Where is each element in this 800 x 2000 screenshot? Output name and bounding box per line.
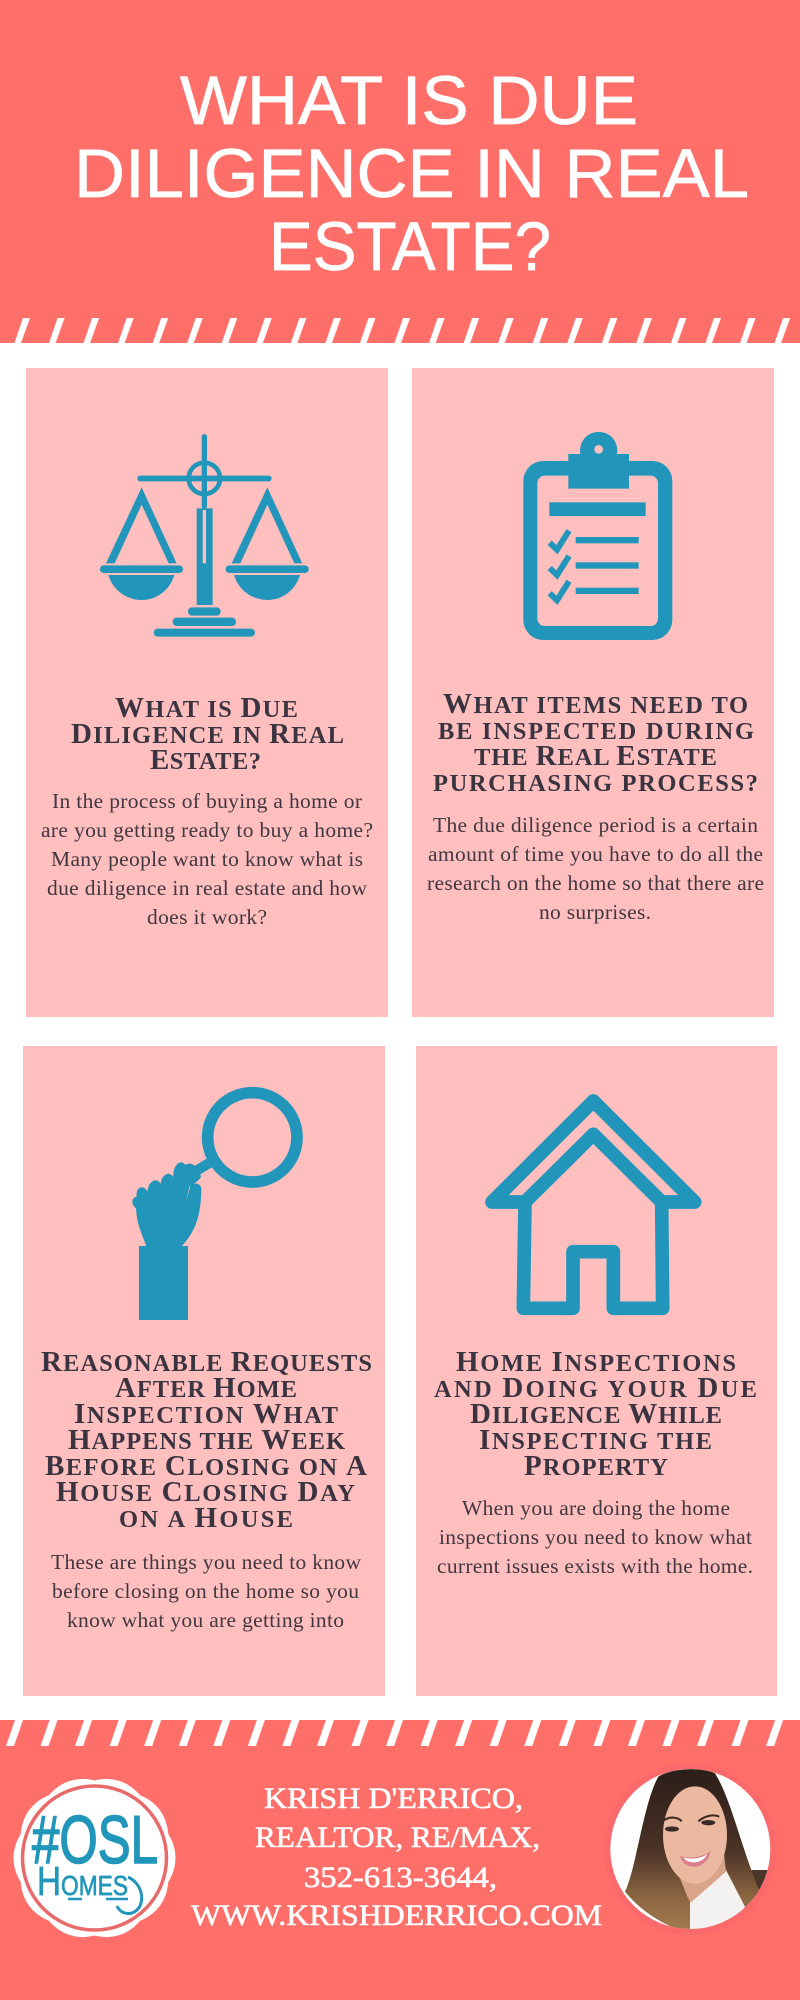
body text (427, 813, 764, 924)
heading: AND DOING YOUR DUE (434, 1372, 757, 1404)
body text: These are things you need to know (51, 1550, 361, 1574)
logo: #OSL Homes badge (0, 1763, 194, 1953)
body text (51, 1550, 361, 1632)
title: DILIGENCE IN REAL (74, 135, 749, 212)
heading: DILIGENCE WHILE (470, 1398, 722, 1430)
body text: are you getting ready to buy a home? (41, 818, 373, 842)
heading: ON A HOUSE (119, 1502, 293, 1534)
body text: research on the home so that there are (427, 871, 764, 895)
heading: WHAT ITEMS NEED TO (443, 688, 748, 720)
logo: #OSL Homes badge: #OSL (32, 1802, 158, 1878)
footer banner (0, 1720, 800, 2000)
body text: Many people want to know what is (51, 847, 363, 871)
title: WHAT IS DUE (180, 62, 638, 139)
heading: REASONABLE REQUESTS (41, 1346, 372, 1378)
body text: When you are doing the home (462, 1496, 730, 1520)
title: ESTATE? (269, 208, 551, 285)
contact details: REALTOR, RE/MAX, (255, 1821, 540, 1854)
heading: PROPERTY (524, 1450, 668, 1482)
icon: scales of justice (100, 434, 309, 637)
title (74, 62, 749, 285)
body text: inspections you need to know what (439, 1525, 752, 1549)
body text (41, 789, 373, 929)
heading: THE REAL ESTATE (474, 740, 717, 772)
heading: BEFORE CLOSING ON A (45, 1450, 367, 1482)
heading (41, 1346, 372, 1534)
heading: AFTER HOME (115, 1372, 297, 1404)
panel: home inspections (416, 1046, 777, 1696)
body text (437, 1496, 753, 1578)
heading: HAPPENS THE WEEK (68, 1424, 345, 1456)
icon: house (492, 1101, 695, 1308)
icon: hand holding magnifying glass (132, 1093, 297, 1320)
heading: HOUSE CLOSING DAY (56, 1476, 355, 1508)
heading: WHAT IS DUE (115, 692, 298, 724)
body text: no surprises. (539, 900, 651, 924)
body text: know what you are getting into (67, 1608, 344, 1632)
header banner (0, 0, 800, 343)
contact details: 352-613-3644, (304, 1861, 497, 1894)
portrait photo (610, 1769, 770, 1929)
logo: #OSL Homes badge: HOMES (37, 1858, 128, 1904)
heading: DILIGENCE IN REAL (71, 718, 344, 750)
body text: due diligence in real estate and how (47, 876, 367, 900)
contact details: KRISH D'ERRICO, (264, 1782, 523, 1815)
icon: clipboard checklist (523, 432, 672, 640)
body text: before closing on the home so you (52, 1579, 359, 1603)
heading: PURCHASING PROCESS? (433, 770, 758, 797)
heading (71, 692, 344, 776)
body text: does it work? (147, 905, 267, 929)
body text: current issues exists with the home. (437, 1554, 753, 1578)
heading: BE INSPECTED DURING (438, 718, 754, 745)
panel: items to inspect (412, 368, 774, 1017)
body text: amount of time you have to do all the (428, 842, 763, 866)
contact details: WWW.KRISHDERRICO.COM (191, 1899, 602, 1932)
heading (433, 688, 758, 797)
contact details (191, 1782, 602, 1932)
heading: INSPECTION WHAT (74, 1398, 338, 1430)
panel: what is due diligence (26, 368, 388, 1017)
body text: In the process of buying a home or (52, 789, 362, 813)
heading: ESTATE? (150, 744, 261, 776)
heading (434, 1346, 757, 1482)
heading: HOME INSPECTIONS (456, 1346, 736, 1378)
heading: INSPECTING THE (479, 1424, 712, 1456)
body text: The due diligence period is a certain (433, 813, 758, 837)
panel: reasonable requests (23, 1046, 385, 1696)
